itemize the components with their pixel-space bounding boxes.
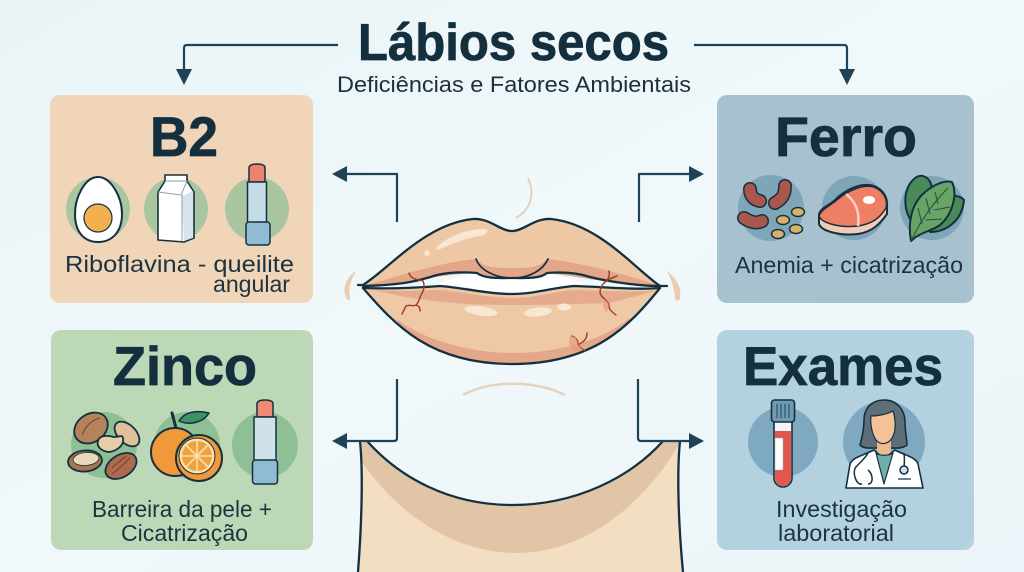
icon: milk carton <box>144 175 208 242</box>
text: barreira: Barreira da pele + <box>92 496 272 522</box>
arrow: title to B2 <box>176 45 338 85</box>
illustration: neck <box>358 441 683 572</box>
text: investigação: Investigação <box>776 496 907 522</box>
highlights <box>424 229 571 318</box>
arrow: lips to Exames <box>638 379 704 449</box>
text: anemia: Anemia + cicatrização <box>735 252 963 278</box>
upper lip <box>363 219 660 286</box>
icon: nuts <box>67 406 144 484</box>
outline <box>358 219 667 364</box>
lower lip <box>363 286 660 364</box>
icon: lip balm <box>232 400 298 484</box>
panel: Zinco <box>51 330 313 550</box>
arrow: title to Ferro <box>694 45 855 85</box>
title: Lábios secos <box>358 14 669 72</box>
mouth opening <box>437 273 588 294</box>
panel: Ferro <box>717 95 974 303</box>
icon: doctor <box>843 400 925 488</box>
text: investigação: laboratorial <box>778 520 894 546</box>
heading: Zinco: Zinco <box>113 335 257 397</box>
icon: beans <box>738 175 804 241</box>
icon: orange <box>151 412 222 481</box>
text: riboflavina: Riboflavina - queilite <box>65 251 294 277</box>
cracks <box>402 271 617 351</box>
text: barreira: Cicatrização <box>121 520 248 546</box>
subtitle: Deficiências e Fatores Ambientais <box>337 72 691 97</box>
text: investigação <box>776 496 907 546</box>
text: riboflavina: angular <box>213 271 290 297</box>
heading: Exames: Exames <box>743 335 943 397</box>
skin marks <box>463 178 565 395</box>
icon: spinach <box>900 176 964 241</box>
icon: egg <box>66 177 130 242</box>
heading: B2: B2 <box>150 105 218 168</box>
panel: Exames <box>717 330 974 550</box>
icon: blood tube <box>748 400 818 487</box>
illustration: dry lips <box>345 178 680 395</box>
text: riboflavina <box>65 251 294 297</box>
text: barreira <box>92 496 272 546</box>
arrow: lips to Zinco <box>332 379 397 449</box>
heading: Ferro: Ferro <box>775 105 917 168</box>
arrow: lips to Ferro <box>639 166 704 222</box>
panel: B2 <box>50 95 313 303</box>
icon: lip balm <box>225 164 289 245</box>
icon: steak <box>819 176 887 240</box>
arrow: lips to B2 <box>332 166 397 222</box>
